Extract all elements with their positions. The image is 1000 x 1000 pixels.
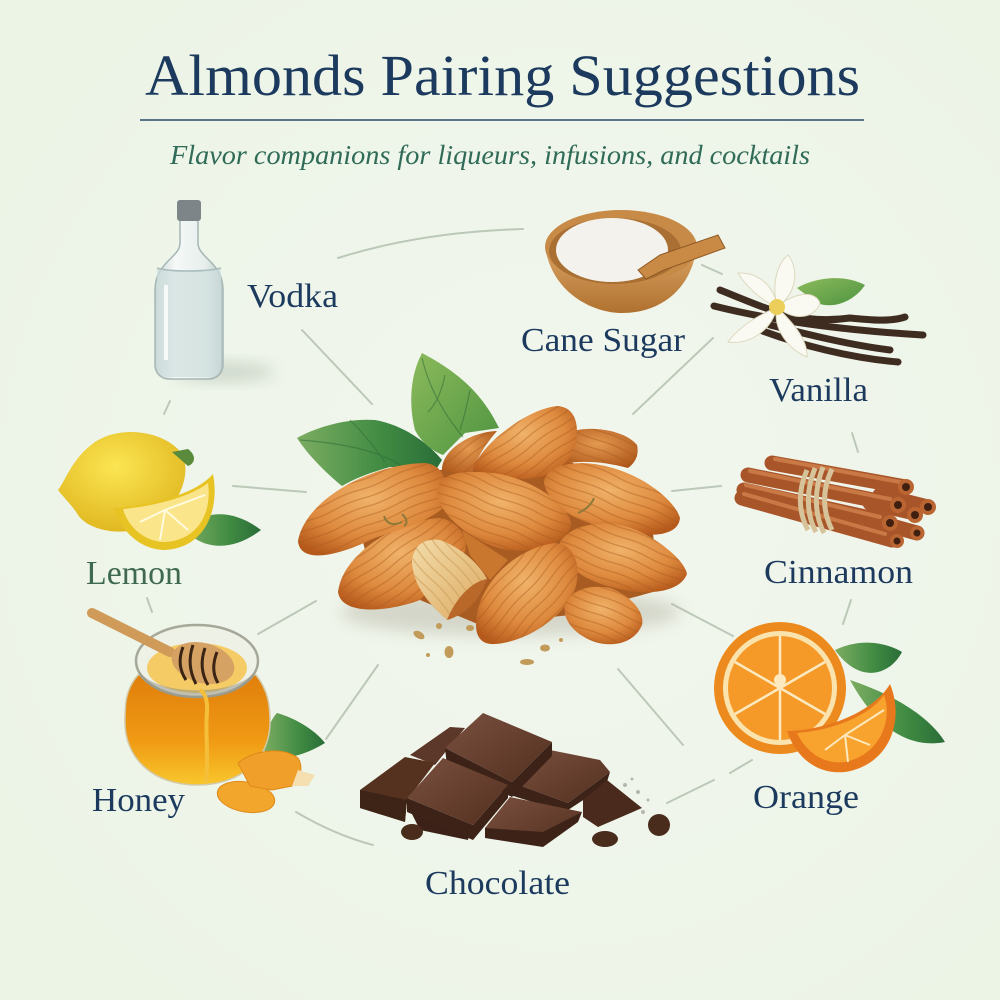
halved almond bbox=[412, 540, 487, 620]
label: Orange: Orange bbox=[753, 779, 859, 816]
orange slices bbox=[215, 751, 315, 817]
icon: cinnamon bbox=[742, 459, 936, 548]
icon: orange bbox=[714, 622, 945, 772]
back almonds bbox=[442, 431, 497, 476]
left lower almond bbox=[338, 518, 466, 610]
icon: almond pile bbox=[297, 353, 687, 665]
right lower almond bbox=[560, 524, 687, 592]
title: Almonds Pairing Suggestions bbox=[145, 43, 860, 108]
filler almond bbox=[462, 530, 508, 580]
top piece bbox=[445, 713, 552, 782]
label: Vanilla: Vanilla bbox=[769, 372, 868, 409]
label: Honey: Honey bbox=[92, 782, 185, 819]
right pieces bbox=[513, 750, 610, 803]
icon: honey jar bbox=[92, 613, 325, 817]
icon: sugar bowl bbox=[545, 210, 725, 313]
right almond bbox=[544, 463, 680, 535]
almond leaves bbox=[297, 353, 499, 486]
label: Cinnamon: Cinnamon bbox=[764, 554, 913, 591]
icon: vanilla bbox=[714, 255, 923, 362]
small almond bbox=[565, 587, 642, 644]
pile backing bbox=[360, 455, 660, 625]
bottom almond bbox=[476, 543, 578, 644]
connector lines bbox=[147, 229, 858, 845]
label: Cane Sugar: Cane Sugar bbox=[521, 322, 686, 359]
icon: lemon bbox=[58, 432, 261, 550]
left big almond bbox=[298, 463, 446, 555]
honey dipper bbox=[92, 613, 239, 691]
crumb pieces bbox=[412, 623, 563, 665]
subtitle: Flavor companions for liqueurs, infusions, and cocktails bbox=[169, 140, 810, 170]
icon: chocolate bbox=[360, 713, 670, 847]
dust bbox=[623, 778, 650, 814]
icon: vodka bottle bbox=[155, 200, 275, 381]
center almond bbox=[437, 472, 571, 551]
label: Vodka: Vodka bbox=[247, 278, 338, 315]
label: Chocolate: Chocolate bbox=[425, 865, 570, 902]
bottle cap bbox=[177, 200, 201, 221]
back pieces bbox=[410, 727, 465, 765]
label: Lemon: Lemon bbox=[86, 555, 182, 592]
pile shadow bbox=[340, 588, 680, 636]
beans bbox=[401, 814, 670, 847]
center piece bbox=[407, 758, 508, 825]
